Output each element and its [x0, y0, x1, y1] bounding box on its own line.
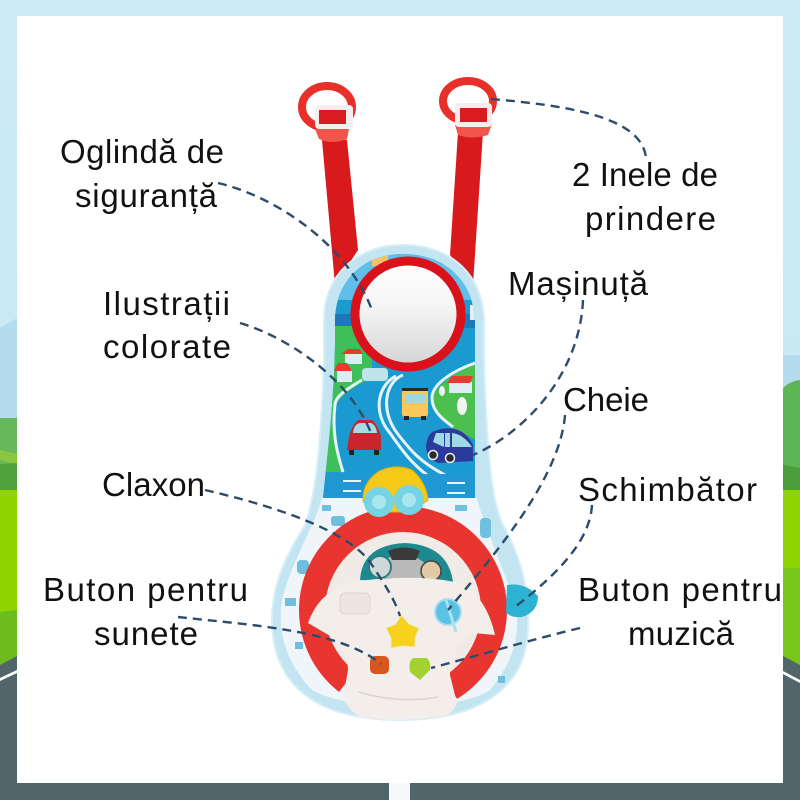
label: Buton pentru sunete: Buton pentru [43, 571, 248, 608]
label: Buton pentru sunete: sunete [94, 615, 198, 652]
right ring [443, 81, 493, 138]
road markings [334, 363, 475, 475]
trees [439, 386, 445, 396]
padded body [272, 245, 528, 720]
label: Ilustrații colorate [103, 285, 231, 365]
red car illustration [347, 420, 381, 455]
callout leader lines [178, 99, 646, 668]
right attachment strap [450, 132, 483, 285]
label: 2 Inele de prindere: prindere [585, 200, 716, 237]
label: Schimbător: Schimbător [578, 471, 757, 508]
road strip [323, 474, 446, 498]
label: Buton pentru muzică [578, 571, 782, 652]
label: Oglindă de siguranță: Oglindă de [60, 133, 224, 170]
white hub [308, 578, 495, 720]
music button [410, 658, 430, 680]
label: Ilustrații colorate: colorate [103, 328, 231, 365]
gear shifter ball [506, 584, 538, 617]
star horn button [386, 615, 419, 648]
camper [362, 368, 388, 381]
key knob [435, 599, 461, 632]
steering wheel rim [312, 519, 494, 701]
horn vent detail [340, 593, 370, 614]
label: Oglindă de siguranță: siguranță [75, 177, 218, 214]
grass hills [326, 326, 372, 472]
lower fabric panel with small icons [281, 498, 517, 706]
label: Buton pentru sunete [43, 571, 248, 652]
label: 2 Inele de prindere [572, 156, 718, 237]
label: Cheie: Cheie [563, 381, 649, 418]
sounds button [370, 656, 389, 674]
bus illustration [402, 388, 428, 420]
blue car illustration [426, 428, 473, 463]
label: 2 Inele de prindere: 2 Inele de [572, 156, 718, 193]
dashboard dials [360, 543, 453, 582]
label: Buton pentru muzică: Buton pentru [578, 571, 782, 608]
label: Mașinuță: Mașinuță [508, 265, 649, 302]
houses [334, 349, 473, 393]
road scene illustration [320, 250, 480, 500]
label: Buton pentru muzică: muzică [628, 615, 735, 652]
label: Claxon: Claxon [102, 466, 205, 503]
label: Ilustrații colorate: Ilustrații [103, 285, 230, 322]
label: Oglindă de siguranță [60, 133, 224, 214]
left ring [302, 86, 353, 142]
mirror [355, 261, 461, 367]
left attachment strap [322, 140, 358, 285]
hub lower groove [358, 692, 438, 700]
yellow toy car [363, 467, 428, 517]
product: baby car steering wheel toy [272, 81, 538, 720]
